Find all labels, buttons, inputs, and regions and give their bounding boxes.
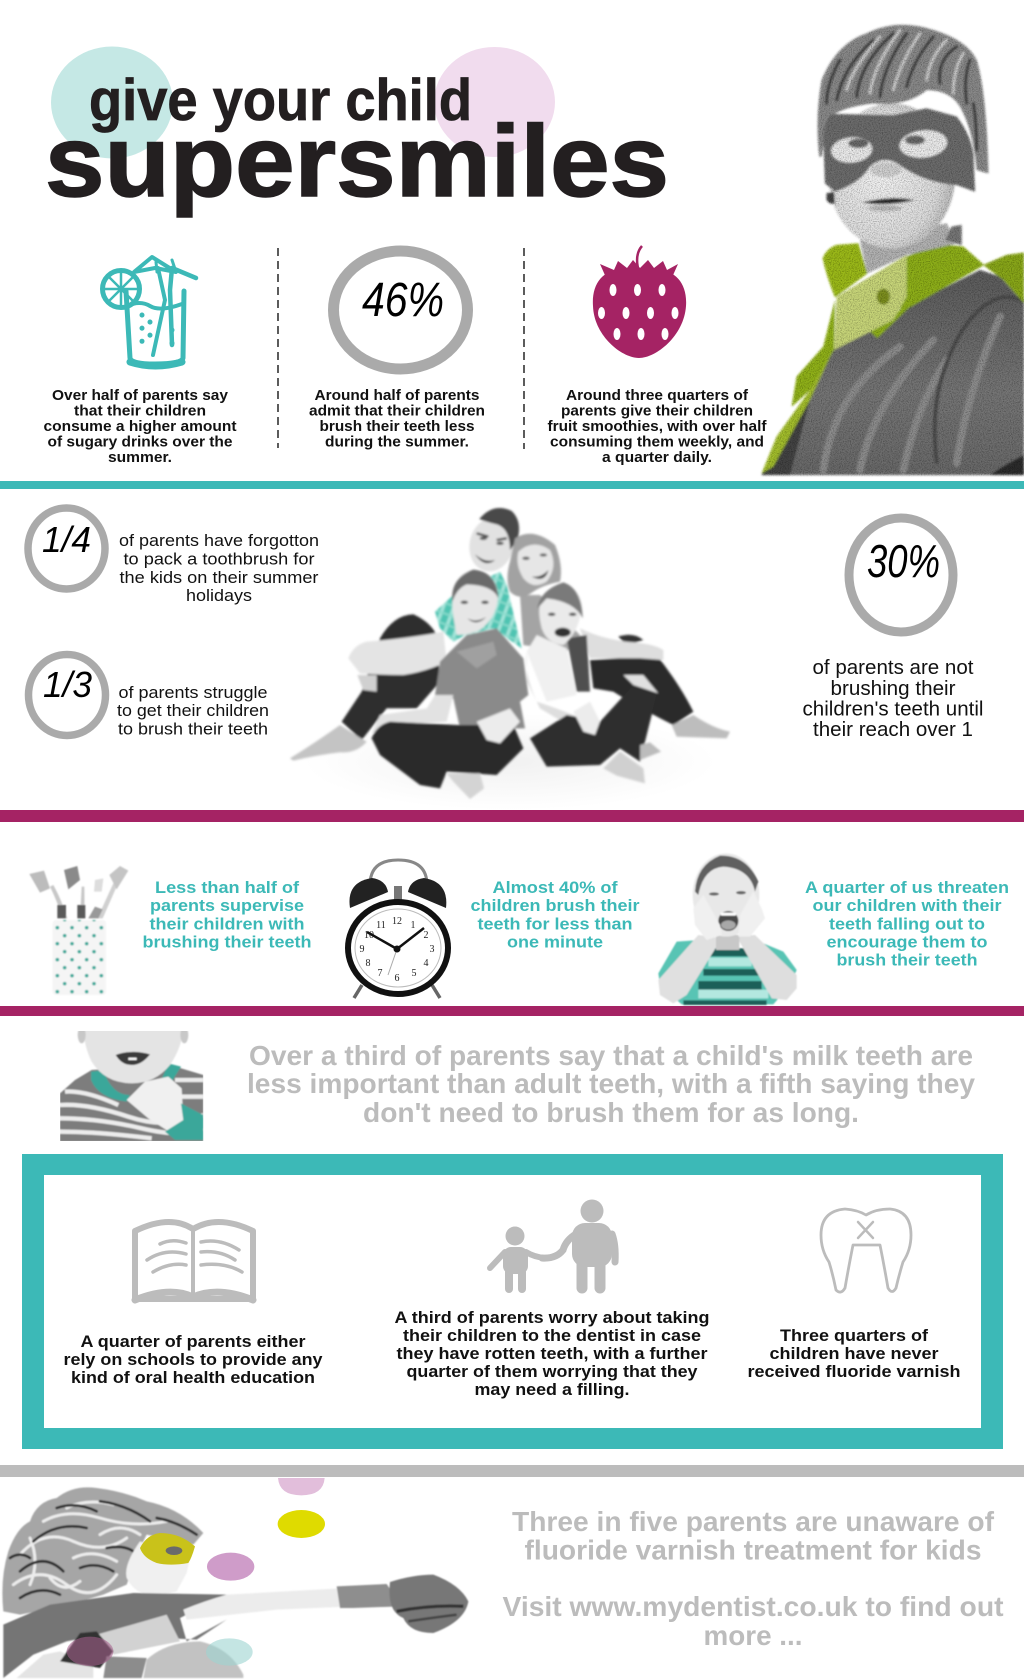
icon: drink glass (102, 257, 196, 366)
text: milk teeth statement: Over a third of parents say that a child's milk teeth are (249, 1040, 973, 1071)
icon: alarm clock: 10 (364, 930, 374, 941)
photo: family sitting together (290, 508, 730, 810)
text: smoothies: a quarter daily. (602, 449, 712, 466)
decorative dots (207, 1478, 325, 1581)
text: fluoride varnish: children have never (770, 1344, 939, 1363)
icon: alarm clock: 12 (392, 916, 402, 927)
text: dentist worries: quarter of them worrying that they (406, 1362, 698, 1381)
text: forgotten toothbrush (119, 531, 319, 605)
text: thirty percent: of parents are not (812, 657, 974, 679)
text: under one minute: Almost 40% of (492, 878, 618, 897)
text: thirty percent (802, 657, 984, 741)
icon: alarm clock: 7 (378, 968, 382, 979)
text: under one minute: teeth for less than (478, 914, 632, 934)
text: struggle to brush: to get their children (117, 701, 269, 720)
text: call to action (502, 1506, 1004, 1651)
icon: tooth (821, 1209, 911, 1292)
text: brushing less: during the summer. (325, 434, 469, 450)
text: call to action: Three in five parents are unaware of (512, 1506, 995, 1537)
text: struggle to brush: of parents struggle (118, 683, 268, 702)
text: fluoride varnish: received fluoride varnish (748, 1362, 960, 1381)
text: milk teeth statement (247, 1040, 975, 1128)
icon: alarm clock (348, 860, 448, 998)
text: supervising: their children with (150, 914, 304, 934)
text: threatening teeth: brush their teeth (836, 950, 978, 970)
text: struggle to brush: to brush their teeth (118, 720, 268, 738)
text: sugary drinks: consume a higher amount (44, 418, 236, 435)
text: school education: A quarter of parents either (80, 1332, 306, 1351)
text: threatening teeth (805, 878, 1009, 970)
text: thirty percent: children's teeth until (802, 698, 984, 720)
text: supervising: Less than half of (155, 878, 299, 897)
text: smoothies: Around three quarters of (566, 387, 749, 404)
text: under one minute: children brush their (470, 896, 640, 915)
text: call to action: more ... (704, 1620, 802, 1651)
stat ring: 1/4: 1/4 (42, 519, 91, 560)
text: fluoride varnish: Three quarters of (780, 1326, 928, 1345)
text: supervising (142, 878, 312, 952)
text: sugary drinks: Over half of parents say (52, 387, 229, 404)
panel: one quarter forgot toothbrush (28, 508, 319, 605)
text: struggle to brush (117, 683, 269, 738)
text: smoothies: consuming them weekly, and (550, 434, 764, 450)
stat ring: 46% (334, 251, 468, 369)
text: brushing less: Around half of parents (314, 387, 480, 404)
icon: alarm clock: 9 (360, 944, 364, 955)
photo: smiling toddler (60, 1025, 203, 1142)
text: school education: rely on schools to provide any (64, 1350, 323, 1369)
text: milk teeth statement: don't need to brush them for as long. (363, 1097, 859, 1128)
stat ring: 46%: 46% (362, 274, 444, 327)
icon: alarm clock: 6 (394, 973, 400, 984)
stat ring: 1/3: 1/3 (43, 664, 92, 705)
text: under one minute (470, 878, 640, 952)
icon: strawberry (593, 246, 686, 358)
stat ring: 1/4 (28, 508, 105, 589)
icon: open book (135, 1222, 253, 1300)
text: forgotten toothbrush: holidays (186, 586, 252, 605)
text: forgotten toothbrush: to pack a toothbrush for (124, 550, 315, 568)
text: sugary drinks (44, 387, 236, 466)
photo: boy in superhero mask (762, 25, 1024, 475)
text: under one minute: one minute (507, 932, 603, 952)
text: school education: kind of oral health education (71, 1368, 315, 1387)
text: dentist worries: may need a filling. (474, 1380, 630, 1399)
icon: alarm clock: 1 (410, 920, 416, 931)
text: supervising: parents supervise (150, 896, 304, 915)
title: supersmiles (45, 106, 669, 218)
stat ring: 30% (849, 518, 953, 632)
text: sugary drinks: that their children (74, 402, 206, 420)
text: brushing less: brush their teeth less (320, 418, 474, 435)
icon: alarm clock: 5 (412, 968, 416, 979)
text: threatening teeth: encourage them to (826, 932, 988, 952)
text: school education (64, 1332, 323, 1387)
text: smoothies: fruit smoothies, with over half (548, 418, 768, 435)
text: thirty percent: brushing their (830, 678, 956, 700)
text: threatening teeth: our children with their (812, 896, 1002, 915)
photo: toothbrushes in spotted cup (29, 866, 128, 995)
title: give your child (89, 68, 472, 133)
text: threatening teeth: A quarter of us threaten (805, 878, 1009, 897)
icon: alarm clock: 11 (376, 920, 386, 931)
icon: alarm clock: 4 (424, 958, 428, 969)
text: sugary drinks: of sugary drinks over the (48, 434, 232, 450)
text: sugary drinks: summer. (108, 449, 172, 466)
text: threatening teeth: teeth falling out to (829, 914, 985, 934)
text: forgotten toothbrush: the kids on their summer (120, 568, 319, 587)
panel: teal framed box (22, 1154, 1003, 1449)
panel: smoothies (548, 246, 768, 466)
text: dentist worries: their children to the dentist in case (403, 1326, 701, 1345)
icon: alarm clock: 8 (366, 958, 370, 969)
text: supervising: brushing their teeth (142, 932, 312, 952)
text: dentist worries (394, 1308, 710, 1399)
text: forgotten toothbrush: of parents have forgotton (119, 531, 319, 550)
text: smoothies (548, 387, 768, 466)
text: call to action: fluoride varnish treatment for kids (524, 1534, 982, 1566)
text: thirty percent: their reach over 1 (813, 719, 973, 741)
stat ring: 1/3 (28, 654, 106, 736)
icon: alarm clock: 3 (430, 944, 434, 955)
text: smoothies: parents give their children (561, 402, 753, 420)
text: fluoride varnish (748, 1326, 960, 1381)
panel: sugary drinks (44, 257, 236, 466)
text: brushing less (309, 387, 485, 450)
icon: alarm clock: 2 (424, 930, 428, 941)
text: call to action: Visit www.mydentist.co.uk to find out (502, 1591, 1004, 1622)
text: dentist worries: they have rotten teeth, with a further (396, 1344, 708, 1363)
mask (140, 1533, 195, 1565)
text: milk teeth statement: less important than adult teeth, with a fifth saying they (247, 1068, 975, 1099)
title (45, 46, 669, 218)
photo: child with hands on cheeks (658, 853, 797, 1005)
stat ring: 30%: 30% (867, 535, 940, 587)
panel: 46 percent (309, 251, 485, 450)
photo: superhero girl punching (2, 1478, 468, 1678)
panel: thirty percent (802, 518, 984, 741)
text: dentist worries: A third of parents worry about taking (394, 1308, 710, 1327)
panel: one third struggle (28, 654, 269, 738)
icon: parent and child (490, 1200, 615, 1289)
text: brushing less: admit that their children (309, 402, 485, 420)
